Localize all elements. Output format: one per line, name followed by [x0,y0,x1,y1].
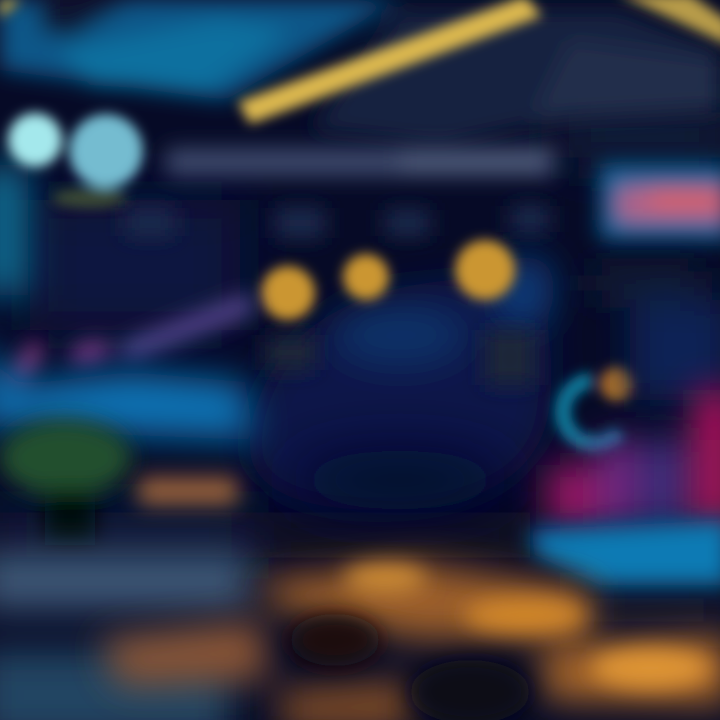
blue platform under chart [530,520,720,585]
neon bar chart [548,390,720,525]
small orange sign [138,477,238,505]
yellow circle markers [261,240,515,320]
purple trend line [18,305,245,378]
dark blob base [290,450,510,510]
grey-blue floor [0,552,250,720]
background haze [0,110,720,630]
orange table highlights [343,563,710,688]
grey labels under the circles [265,330,535,385]
dark table gap [290,614,530,720]
ceiling panel [0,0,720,145]
left wall panel [0,165,28,295]
subheading text blurs [125,206,550,238]
potted plant [0,420,131,545]
heading band [165,148,555,176]
yellow ceiling light [238,0,542,124]
dark right panel [590,270,720,400]
blue wave area [0,340,255,440]
neon sign [600,165,720,240]
cyan donut chart [550,367,640,457]
round light icons [8,113,143,208]
yellow ceiling light, top right [618,0,720,46]
yellow corner glint [0,0,22,18]
large dark-blue speech blob [249,255,555,510]
orange tables [100,562,720,720]
